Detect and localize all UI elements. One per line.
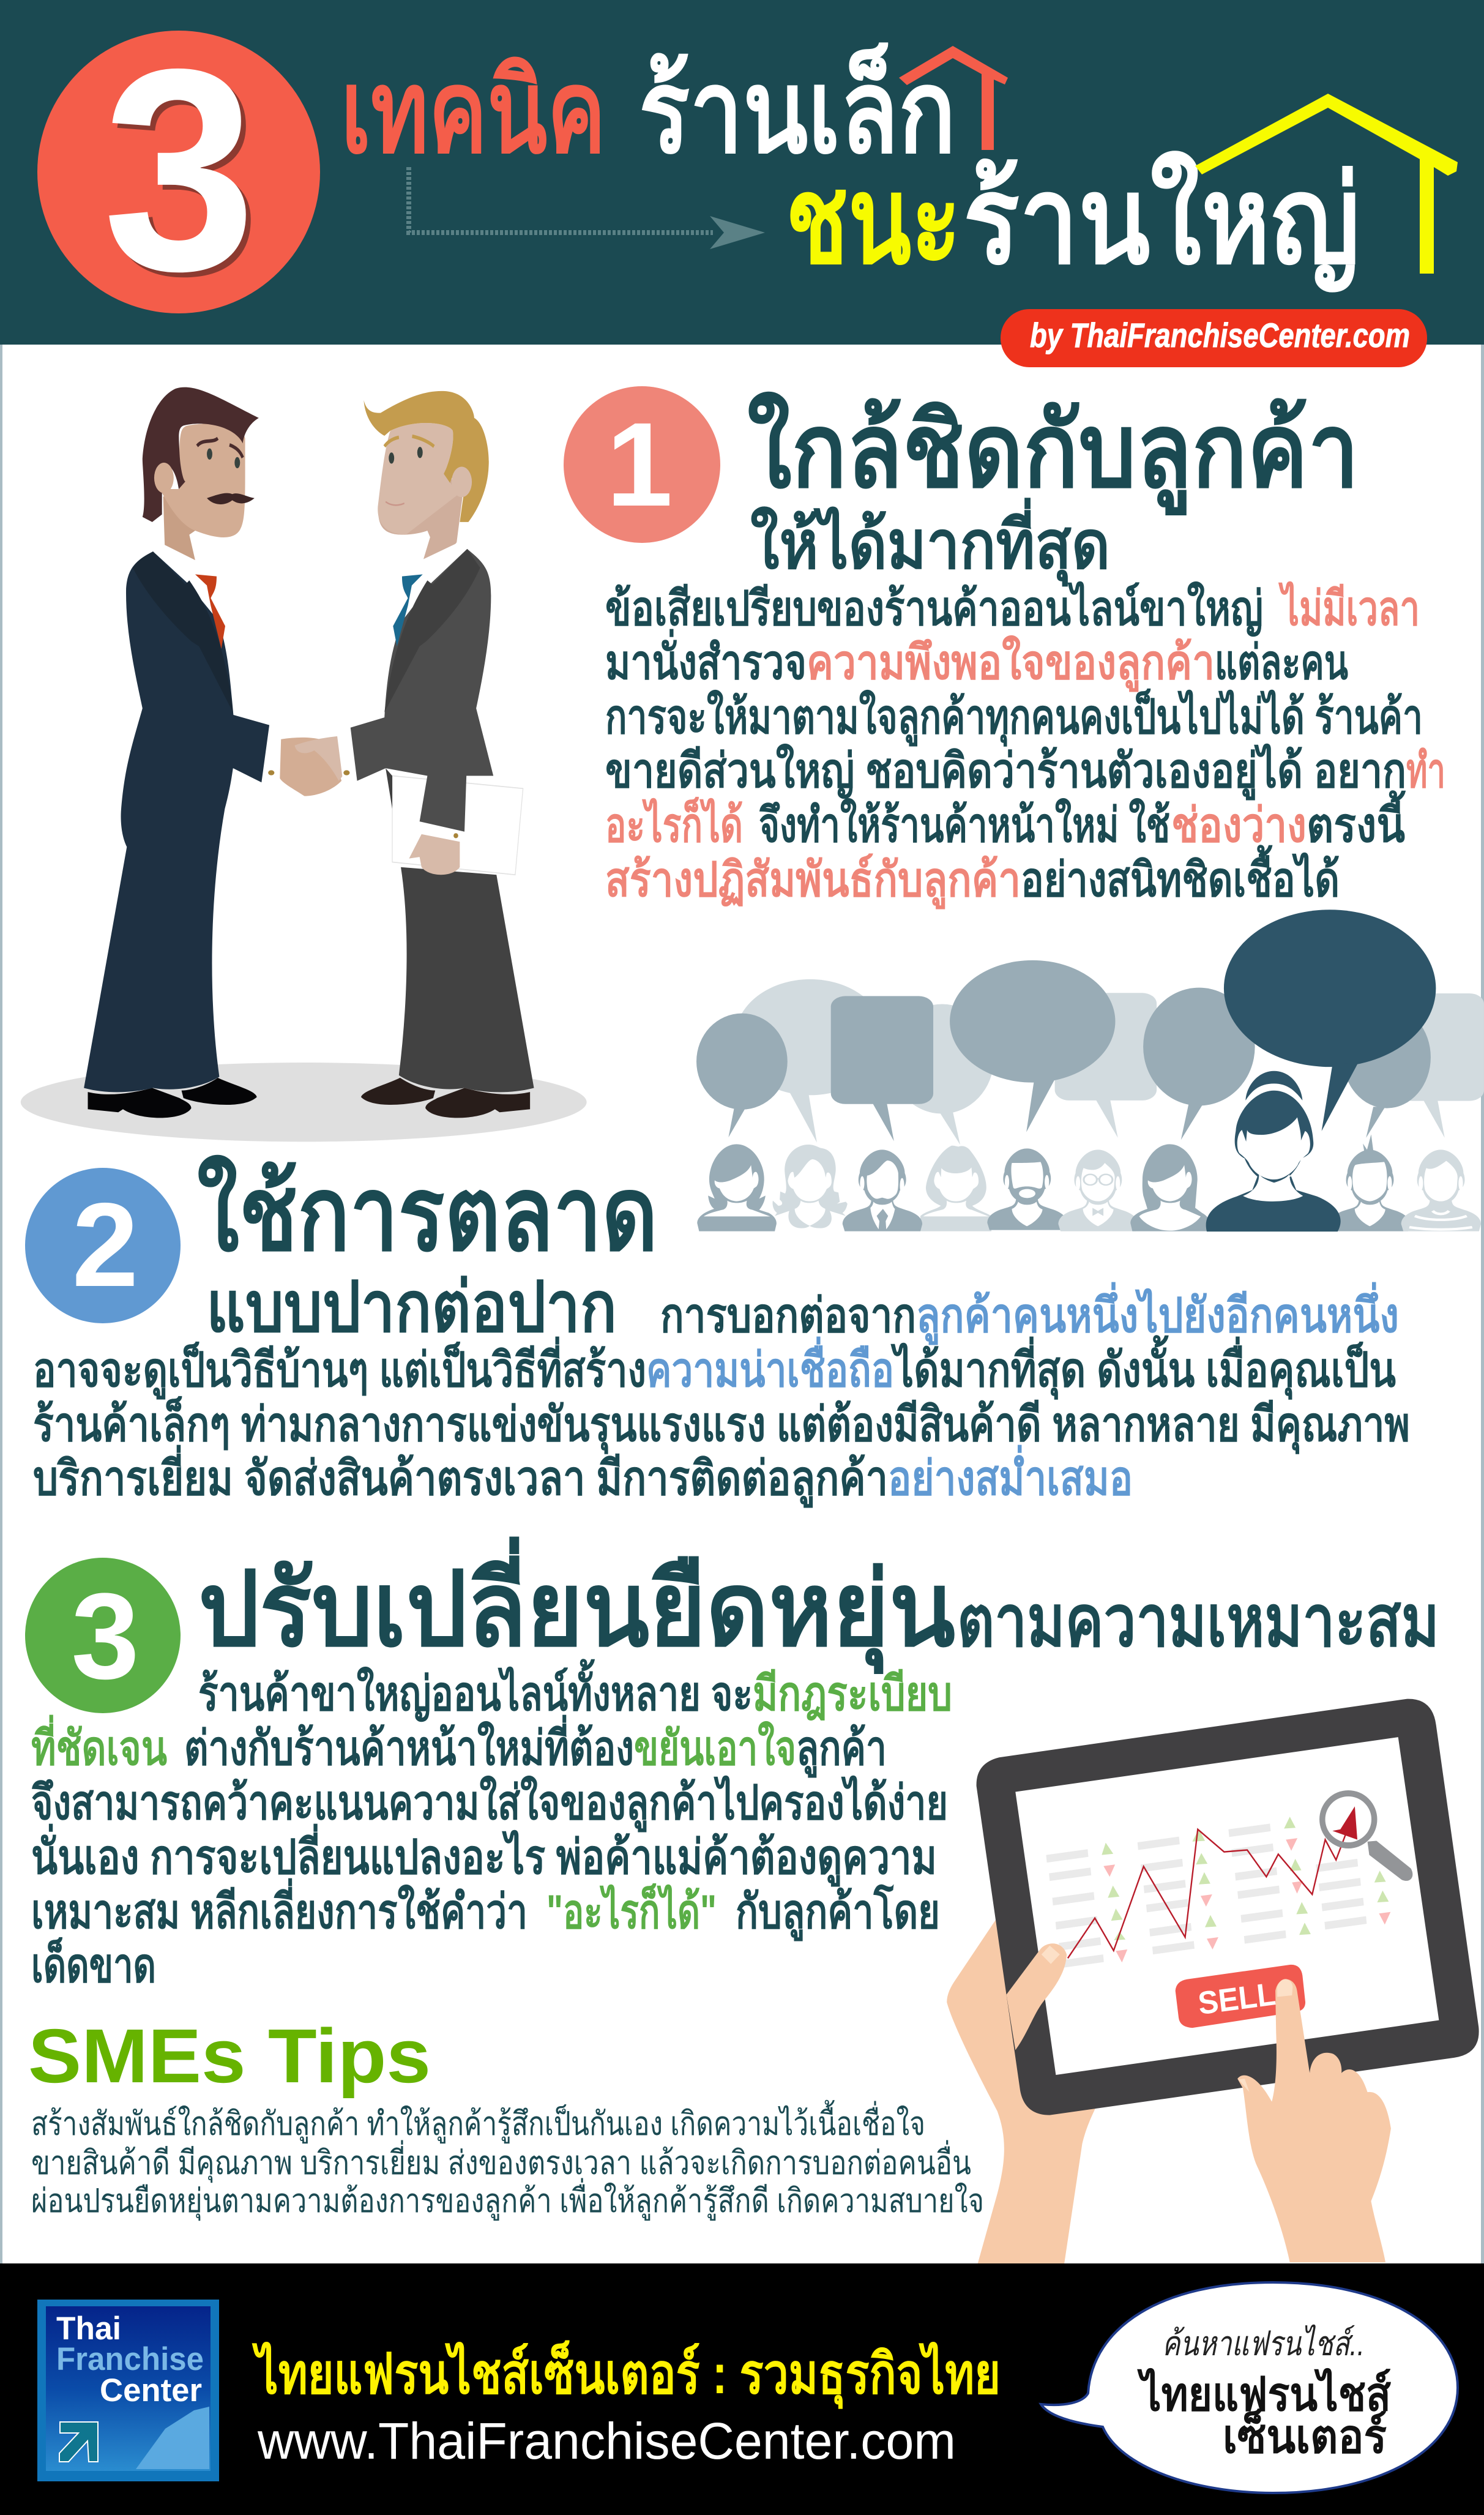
person 8: highlighted woman <box>1206 1071 1341 1231</box>
section 2 body text <box>33 1282 1410 1508</box>
section 2 heading <box>197 1154 658 1347</box>
credit pill <box>1001 309 1427 367</box>
person 1: woman with side fringe <box>697 1144 777 1231</box>
footer Thai slogan: ไทยแฟรนไชส์เซ็นเตอร์ : รวมธุรกิจไทย <box>252 2340 1001 2409</box>
title line 2: ชนะ <box>786 152 961 289</box>
section 3 body text: เด็ดขาด <box>31 1937 156 1992</box>
company logo: Center <box>100 2372 202 2408</box>
callout bubble <box>1041 2282 1458 2493</box>
section 3 body text: "อะไรก็ได้" <box>546 1883 717 1938</box>
section 3 body text: ร้านค้าขาใหญ่ออนไลน์ทั้งหลาย จะ <box>198 1659 753 1722</box>
crowd of people <box>697 1134 1481 1231</box>
section 1 number badge: 1 <box>606 398 673 531</box>
title line 1 <box>341 42 956 177</box>
section 3 body text: ลูกค้า <box>796 1721 887 1778</box>
company logo: Thai <box>56 2311 121 2347</box>
left hand behind tablet <box>947 1920 1097 2264</box>
left businessman <box>84 387 269 1118</box>
footer website: www.ThaiFranchiseCenter.com <box>257 2412 956 2470</box>
SMEs Tips heading: SMEs Tips <box>28 2014 431 2099</box>
section 1 body text: ความพึงพอใจของลูกค้า <box>807 635 1215 692</box>
right businessman <box>351 391 534 1118</box>
header banner <box>0 0 1484 367</box>
callout bubble: เซ็นเตอร์ <box>1223 2408 1387 2463</box>
illustration: hands holding tablet <box>947 1699 1479 2264</box>
section 1 body text: จึงทำให้ร้านค้าหน้าใหม่ ใช้ <box>759 798 1170 852</box>
person 4: long-haired woman <box>920 1146 991 1231</box>
callout bubble: ค้นหาแฟรนไชส์.. <box>1162 2324 1365 2363</box>
section 2 body text: ลูกค้าคนหนึ่งไปยังอีกคนหนึ่ง <box>916 1282 1399 1345</box>
tablet body <box>977 1699 1479 2115</box>
SMEs tips text <box>31 2100 984 2221</box>
section 2 body text: การบอกต่อจาก <box>660 1288 916 1342</box>
chart table rows <box>1046 1823 1367 1968</box>
company logo <box>37 2300 219 2481</box>
callout bubble: ไทยแฟรนไชส์ <box>1137 2367 1392 2421</box>
green and pink markers <box>1102 1817 1390 1962</box>
section 3 body text: ต่างกับร้านค้าหน้าใหม่ที่ต้อง <box>184 1714 634 1775</box>
section 3 heading: ปรับเปลี่ยนยืดหยุ่น <box>198 1536 955 1674</box>
icon: arrow <box>59 2422 98 2462</box>
section 3 number badge <box>25 1558 181 1713</box>
section 1 body text: ข้อเสียเปรียบของร้านค้าออนไลน์ขาใหญ่ <box>605 581 1263 637</box>
SMEs tips text: สร้างสัมพันธ์ใกล้ชิดกับลูกค้า ทำให้ลูกค้ารู้สึกเป็นกันเอง เกิดความไว้เนื้อเชื่อใจ <box>31 2100 925 2143</box>
fingernails <box>1042 1946 1292 2092</box>
illustration: two businessmen shaking hands <box>21 387 587 1142</box>
big number 3 badge <box>37 9 320 335</box>
section 3 body text: จึงสามารถคว้าคะแนนความใส่ใจของลูกค้าไปครองได้ง่าย <box>31 1775 948 1833</box>
section 3 body text: ขยันเอาใจ <box>634 1721 796 1775</box>
person 5: bearded man <box>987 1148 1067 1230</box>
section 3 heading <box>198 1536 1439 1674</box>
title line 2: ร้านใหญ่ <box>963 150 1360 293</box>
dashed arrow <box>409 167 765 249</box>
SMEs tips text: ขายสินค้าดี มีคุณภาพ บริการเยี่ยม ส่งของตรงเวลา แล้วจะเกิดการบอกต่อคนอื่น <box>31 2140 971 2183</box>
icon: small red house roof <box>899 46 1008 150</box>
SMEs tips text: ผ่อนปรนยืดหยุ่นตามความต้องการของลูกค้า เพื่อให้ลูกค้ารู้สึกดี เกิดความสบายใจ <box>31 2178 984 2221</box>
person 10: man in striped sweater <box>1401 1149 1481 1231</box>
red trend line <box>1068 1829 1346 1958</box>
speech bubbles <box>696 910 1484 1145</box>
title line 1: ร้านเล็ก <box>639 42 956 177</box>
section 2 number badge <box>25 1168 181 1323</box>
section 1 body text: ทำ <box>1406 744 1445 798</box>
section 2 body text: อย่างสม่ำเสมอ <box>888 1444 1133 1505</box>
right hand pointing <box>1237 1979 1391 2262</box>
section 1 body text: ช่องว่าง <box>1171 798 1307 852</box>
section 3 body text: นั่นเอง การจะเปลี่ยนแปลงอะไร พ่อค้าแม่ค้าต้องดูความ <box>31 1823 937 1887</box>
section 3 body text: กับลูกค้าโดย <box>736 1883 940 1941</box>
person 2: curly-haired woman <box>772 1145 848 1228</box>
person 3: man with tie <box>843 1149 922 1231</box>
person 7: woman with long straight hair <box>1130 1144 1210 1231</box>
section 1 body text: แต่ละคน <box>1215 635 1348 689</box>
section 3 body text: มีกฎระเบียบ <box>753 1667 952 1721</box>
icon: big yellow house roof <box>1195 94 1458 274</box>
ground shadow <box>21 1063 587 1142</box>
section 2 body text: บริการเยี่ยม จัดส่งสินค้าตรงเวลา มีการติดต่อลูกค้า <box>33 1444 888 1508</box>
section 1 heading: ใกล้ชิดกับลูกค้า <box>747 391 1359 515</box>
person 9: man with spiky hair <box>1330 1134 1410 1231</box>
magnifying glass <box>1322 1793 1412 1881</box>
section 1 body text: อย่างสนิทชิดเชื้อได้ <box>1021 845 1340 906</box>
big number 3 badge: 3 <box>103 9 256 331</box>
company logo: Franchise <box>56 2341 204 2377</box>
section 1 body text: อะไรก็ได้ <box>605 797 743 852</box>
left thumb <box>1007 1943 1067 2050</box>
section 3 body text: ที่ชัดเจน <box>31 1714 167 1775</box>
section 3 body text: เหมาะสม หลีกเลี่ยงการใช้คำว่า <box>31 1878 528 1938</box>
big number 3 badge: 3 <box>108 14 261 335</box>
section 1 heading: ให้ได้มากที่สุด <box>750 498 1110 587</box>
section 2 number badge: 2 <box>72 1178 138 1312</box>
clasped hands <box>268 736 349 796</box>
section 1 number badge <box>564 386 720 543</box>
tablet screen <box>1015 1737 1439 2075</box>
section 2 heading: ใช้การตลาด <box>197 1154 658 1272</box>
section 2 body text: ความน่าเชื่อถือ <box>646 1336 894 1397</box>
title line 1: เทคนิค <box>341 47 606 177</box>
SELL button: SELL <box>1196 1976 1277 2021</box>
footer bar <box>0 2263 1484 2515</box>
section 2 heading: แบบปากต่อปาก <box>206 1268 617 1347</box>
section 1 body text: ไม่มีเวลา <box>1278 581 1420 635</box>
title line 2 <box>786 150 1360 293</box>
SELL button <box>1176 1965 1305 2028</box>
section 1 body text: สร้างปฏิสัมพันธ์กับลูกค้า <box>605 853 1021 910</box>
section 3 number badge: 3 <box>71 1568 140 1705</box>
section 1 body text: ตรงนี้ <box>1307 790 1406 852</box>
section 3 body text <box>31 1659 952 1992</box>
illustration: crowd with speech bubbles <box>696 910 1484 1231</box>
person 6: man with glasses and bow tie <box>1058 1149 1138 1231</box>
section 1 heading <box>747 391 1359 587</box>
section 2 body text: อาจจะดูเป็นวิธีบ้านๆ แต่เป็นวิธีที่สร้าง <box>33 1336 646 1400</box>
section 1 body text: มานั่งสำรวจ <box>605 629 807 689</box>
section 1 body text <box>605 581 1445 910</box>
